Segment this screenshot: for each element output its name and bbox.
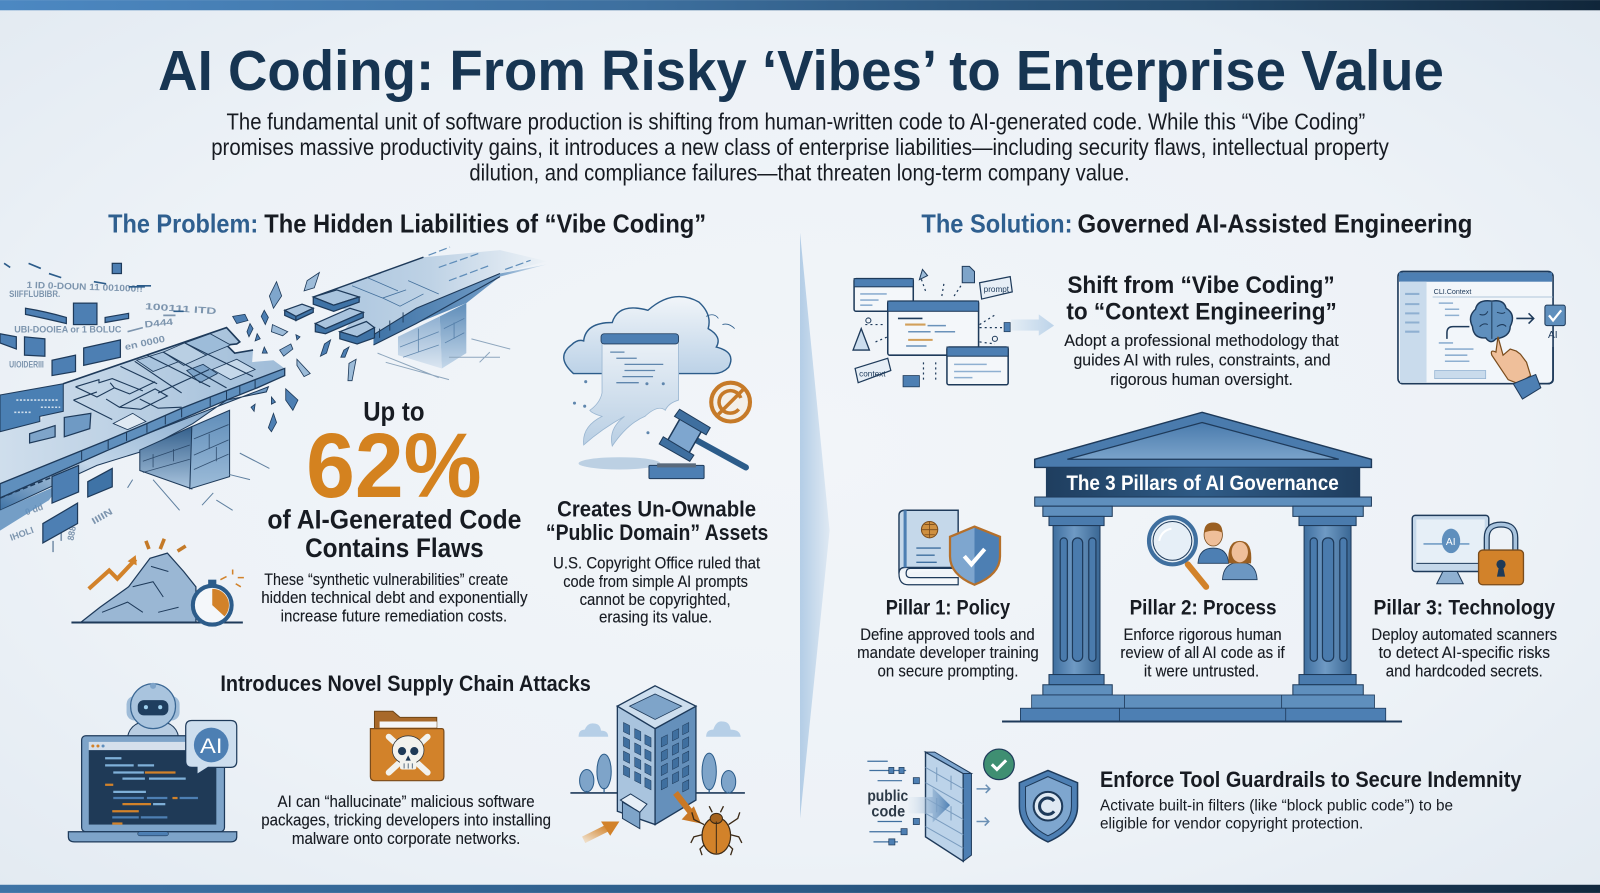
illustration: crumbling bridge and data stream xyxy=(0,247,547,552)
pillar 1: policy: Pillar 1: Policy xyxy=(886,596,1011,619)
icon: handbook and shield xyxy=(899,510,1000,585)
text: tool guardrails: Activate built-in filters (like “block public code”) to be xyxy=(1100,797,1453,814)
heading: the solution: Governed AI-Assisted Engineering xyxy=(1078,211,1472,239)
bottom bar xyxy=(0,885,1600,893)
label: public code: public xyxy=(867,788,909,805)
data stream fragments: lower xyxy=(30,413,112,543)
icon: vanishing code cloud and gavel xyxy=(564,297,750,479)
data stream marks: D444 xyxy=(144,317,175,330)
icon: skull folder xyxy=(370,711,444,781)
stat: 62 percent: of AI-Generated Code xyxy=(267,505,521,535)
icon: brain in governed editor with hand: CLI.Context xyxy=(1434,288,1471,296)
heading: the problem: The Problem: xyxy=(108,211,258,239)
broken brick ends xyxy=(285,290,374,344)
data stream marks: 0 dd xyxy=(24,502,44,517)
heading: the problem xyxy=(108,211,706,239)
data stream marks: 888 xyxy=(66,525,78,541)
pillar 2: process xyxy=(1120,517,1285,681)
text: public domain assets: code from simple AI prompts xyxy=(563,572,748,591)
panel: the solution xyxy=(853,211,1565,861)
intro text block: dilution, and compliance failures—that threaten long-term company value. xyxy=(469,160,1130,186)
right column xyxy=(1293,506,1363,695)
icon: robot at laptop xyxy=(68,683,237,842)
pillar 3: technology: and hardcoded secrets. xyxy=(1386,662,1543,681)
left column xyxy=(1043,506,1112,695)
text: hallucinate: AI can “hallucinate” malicious software xyxy=(278,792,535,811)
windows xyxy=(623,723,689,792)
data stream marks: 100111 ITD xyxy=(145,301,217,316)
top bar xyxy=(0,0,1600,10)
text: synthetic vulnerabilities: hidden technical debt and exponentially xyxy=(261,588,528,607)
diagram: temple of governance xyxy=(1002,412,1402,722)
pillar 1: policy: Define approved tools and xyxy=(860,625,1035,644)
icon: monitor and padlock: AI xyxy=(1446,537,1456,548)
divider arrow xyxy=(800,233,830,818)
label: public code: code xyxy=(871,803,905,820)
pillar 2: process: Pillar 2: Process xyxy=(1130,596,1277,619)
stat: 62 percent: Contains Flaws xyxy=(305,533,484,563)
text: public domain assets: erasing its value. xyxy=(599,608,712,627)
label: public code xyxy=(867,788,909,820)
text: synthetic vulnerabilities xyxy=(261,570,528,626)
data stream fragments: upper xyxy=(0,263,129,376)
data stream marks: UIOIDERIII xyxy=(9,359,44,369)
icon: brain in governed editor with hand xyxy=(1398,272,1565,399)
icon: brain in governed editor with hand: AI xyxy=(1548,330,1558,341)
pillar 2: process: Enforce rigorous human xyxy=(1123,625,1282,644)
data stream marks: SIIFFLUBIBR. xyxy=(9,289,60,299)
heading: the problem: The Hidden Liabilities of “Vibe Coding” xyxy=(264,211,706,239)
pillar 1: policy: mandate developer training xyxy=(857,643,1039,662)
text: hallucinate: packages, tricking developers into installing xyxy=(261,811,551,830)
intro text block: promises massive productivity gains, it introduces a new class of enterprise liabilities—including security flaws, intellectual property xyxy=(211,134,1389,160)
heading: the solution xyxy=(921,211,1472,239)
icon: AI speech bubble: AI xyxy=(200,734,222,758)
panel: the problem xyxy=(0,211,768,855)
shield with copyright xyxy=(1019,770,1078,842)
icon: office building under attack xyxy=(570,686,745,855)
data stream marks: IIIIN xyxy=(90,506,114,526)
text: synthetic vulnerabilities: increase future remediation costs. xyxy=(281,607,507,626)
icon: bug xyxy=(691,806,742,855)
pillar 1: policy: on secure prompting. xyxy=(878,662,1018,681)
icon: AI speech bubble xyxy=(186,720,237,775)
icon: scattered prompts becoming organized windows xyxy=(853,266,1054,387)
heading: supply chain attacks: Introduces Novel Supply Chain Attacks xyxy=(220,671,591,696)
icon: debris pile with timer xyxy=(71,539,244,625)
pillar 2: process: review of all AI code as if xyxy=(1120,643,1285,662)
pediment xyxy=(1035,412,1371,467)
stat: 62 percent: 62% xyxy=(306,415,482,517)
text: tool guardrails: Enforce Tool Guardrails to Secure Indemnity xyxy=(1100,767,1522,792)
pillar 3: technology: Deploy automated scanners xyxy=(1371,625,1557,644)
arrow xyxy=(1011,314,1054,336)
pillar 1: policy xyxy=(857,510,1039,681)
data stream marks: en 0000 xyxy=(124,334,166,352)
trees xyxy=(580,753,736,793)
lower slab xyxy=(0,387,268,510)
data stream marks: UBI-DOOIEA or 1 BOLUC xyxy=(14,325,122,335)
pillar 3: technology: to detect AI-specific risks xyxy=(1379,643,1550,662)
clouds xyxy=(579,721,741,737)
data stream marks: 1 ID 0-DOUN 11 001000!! xyxy=(26,280,143,294)
pier xyxy=(140,427,192,489)
text: context engineering xyxy=(1064,272,1339,389)
title: AI Coding: From Risky ‘Vibes’ to Enterprise Value xyxy=(158,39,1444,102)
heading: the solution: The Solution: xyxy=(921,211,1072,239)
icon: magnifier and reviewers xyxy=(1149,517,1257,587)
text: tool guardrails: eligible for vendor copyright protection. xyxy=(1100,816,1363,833)
data banner xyxy=(0,384,63,432)
stat: 62 percent: Up to xyxy=(363,396,424,426)
text: public domain assets: cannot be copyrighted, xyxy=(580,590,731,609)
icon: scattered prompts becoming organized windows: context xyxy=(859,370,886,379)
broken far bridge xyxy=(285,247,547,380)
data stream marks xyxy=(4,263,217,552)
deck surface xyxy=(0,328,285,484)
pillar 3: technology xyxy=(1371,515,1557,681)
text: context engineering: rigorous human oversight. xyxy=(1110,370,1293,389)
text: context engineering: Shift from “Vibe Coding” xyxy=(1067,272,1335,299)
text: hallucinate xyxy=(261,792,551,848)
frieze banner: The 3 Pillars of AI Governance xyxy=(1066,471,1339,495)
flying debris xyxy=(233,273,356,432)
deck paving xyxy=(113,334,255,430)
data stream marks: IHOLI xyxy=(8,525,35,543)
text: public domain assets: Creates Un-Ownable xyxy=(557,496,756,521)
text: hallucinate: malware onto corporate networks. xyxy=(292,829,520,848)
intro text block xyxy=(211,109,1389,186)
icon: scattered prompts becoming organized windows: prompt xyxy=(984,285,1010,294)
text: context engineering: Adopt a professional methodology that xyxy=(1064,331,1339,350)
text: tool guardrails xyxy=(1100,767,1522,833)
pillar 2: process: it were untrusted. xyxy=(1144,662,1259,681)
pillar 3: technology: Pillar 3: Technology xyxy=(1373,596,1555,619)
orange attack arrows xyxy=(584,827,610,840)
main bridge xyxy=(0,328,285,531)
text: public domain assets xyxy=(546,496,768,627)
intro text block: The fundamental unit of software production is shifting from human-written code to AI-generated code. While this “Vibe Coding” xyxy=(227,109,1365,135)
stat: 62 percent xyxy=(267,396,521,563)
icon: firewall blocking public code xyxy=(867,749,1078,861)
text: synthetic vulnerabilities: These “synthetic vulnerabilities” create xyxy=(264,570,508,589)
text: public domain assets: “Public Domain” Assets xyxy=(546,520,768,545)
text: public domain assets: U.S. Copyright Office ruled that xyxy=(553,553,760,572)
text: context engineering: to “Context Engineering” xyxy=(1066,298,1337,325)
deck xyxy=(313,250,547,335)
front bricks xyxy=(0,368,285,498)
icon: monitor and padlock xyxy=(1412,515,1523,585)
temple steps xyxy=(1002,695,1402,722)
text: context engineering: guides AI with rules, constraints, and xyxy=(1073,350,1331,369)
